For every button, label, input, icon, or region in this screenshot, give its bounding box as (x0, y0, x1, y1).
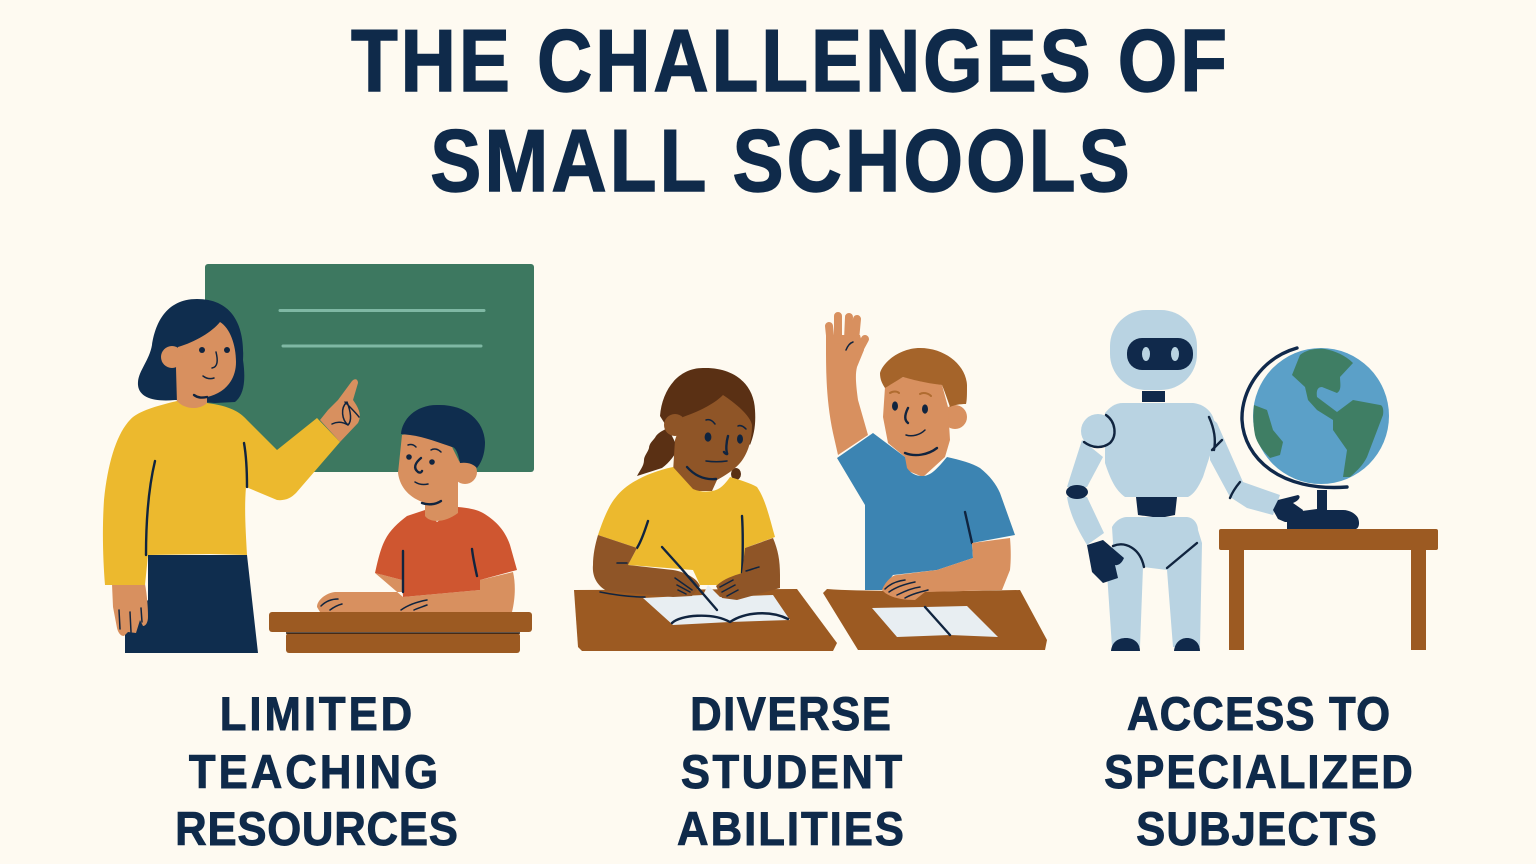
teacher (103, 299, 360, 653)
girl's desk and book (574, 585, 837, 651)
seated boy (317, 405, 517, 612)
panel: access to specialized subjects illustration (1066, 310, 1438, 651)
label: limited teaching resources: RESOURCES (175, 803, 458, 855)
globe table (1219, 529, 1438, 650)
label: diverse student abilities: ABILITIES (677, 803, 904, 855)
label: access to specialized subjects (1104, 688, 1413, 855)
label: access to specialized subjects: SUBJECTS (1136, 803, 1377, 855)
robot (1066, 310, 1303, 651)
boy with raised hand (826, 316, 1015, 600)
label: diverse student abilities (677, 688, 904, 855)
panel: diverse student abilities illustration (574, 316, 1047, 651)
label: access to specialized subjects: ACCESS TO (1127, 688, 1390, 740)
label: limited teaching resources (175, 688, 458, 855)
girl (593, 395, 780, 610)
title (351, 12, 1227, 210)
title: THE CHALLENGES OF (351, 12, 1227, 110)
label: access to specialized subjects: SPECIALIZED (1104, 746, 1413, 798)
boy's desk and book (823, 589, 1047, 650)
front desk (269, 612, 532, 653)
title: SMALL SCHOOLS (430, 112, 1130, 210)
label: diverse student abilities: DIVERSE (690, 688, 891, 740)
braid and girl's hair (637, 368, 755, 480)
chalkboard (205, 264, 534, 472)
globe (1242, 348, 1389, 529)
panel: limited teaching resources illustration (103, 264, 534, 653)
label: limited teaching resources: LIMITED (220, 688, 412, 740)
label: limited teaching resources: TEACHING (189, 746, 438, 798)
label: diverse student abilities: STUDENT (681, 746, 902, 798)
